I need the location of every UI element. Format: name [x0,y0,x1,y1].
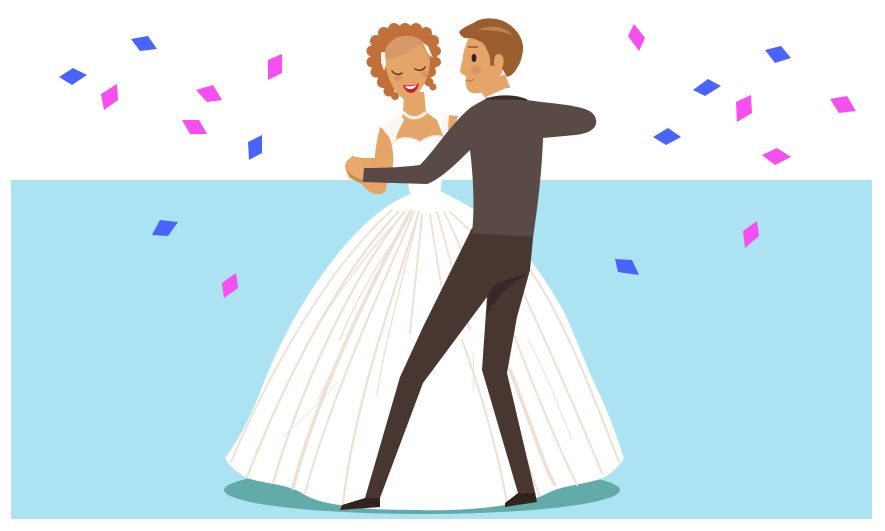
groom hair highlight [478,27,513,36]
groom mouth [466,79,474,81]
blue floor panel [11,180,872,519]
bride [225,23,624,510]
right shoe [505,492,537,507]
left shoe [340,498,380,510]
bride eyes [392,67,425,74]
groom cheek [471,66,481,74]
bride cheeks [394,75,402,81]
floor shadow [224,466,620,514]
bride fringe [385,36,431,61]
confetti: pink [101,24,856,298]
bodice neckline fold [392,136,443,144]
dress bodice [392,136,447,209]
wedding dress skirt [225,192,624,510]
groom eye [472,54,476,62]
groom hand clasped [345,157,364,180]
pearl necklace [404,112,426,118]
bride face [385,42,430,100]
hair leaves [381,43,433,71]
jacket collar [487,96,527,100]
groom shirt collar [486,88,528,103]
groom face [460,28,512,93]
bride smile [403,83,419,93]
groom neck [478,74,514,100]
groom [340,18,596,510]
bride arm [345,127,393,194]
dress sleeves [381,113,449,142]
groom hair [459,18,523,77]
groom ear [494,54,504,69]
skirt pleats [231,210,619,503]
bride far shoulder [446,115,458,132]
trouser shadow [487,274,526,314]
groom trousers [365,228,535,498]
bride neck and chest [395,92,444,146]
bride curly hair [366,23,441,100]
confetti: blue [59,36,791,275]
groom jacket [363,96,596,237]
